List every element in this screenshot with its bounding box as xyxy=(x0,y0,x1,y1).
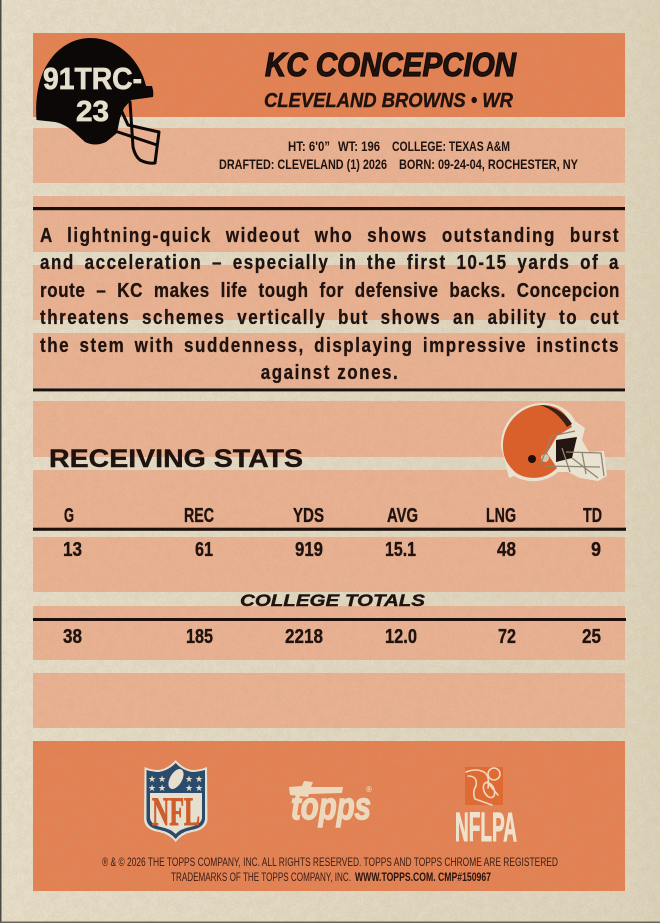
icon: NFL shield xyxy=(144,760,208,842)
table row: college totals: 12.0 xyxy=(385,626,417,648)
panel: player info band xyxy=(33,128,625,183)
player vitals: DRAFTED: CLEVELAND (1) 2026 xyxy=(219,157,387,172)
copyright text: TRADEMARKS OF THE TOPPS COMPANY, INC. xyxy=(171,870,351,884)
icon: NFL shield: ★ xyxy=(195,775,203,785)
copyright text: WWW.TOPPS.COM. CMP#150967 xyxy=(355,870,491,884)
icon: Topps logo: topps xyxy=(291,786,371,828)
stats heading: RECEIVING STATS xyxy=(49,445,303,473)
table row: season stats: 13 xyxy=(63,539,82,561)
player vitals: COLLEGE: TEXAS A&M xyxy=(392,139,510,154)
icon: NFLPA logo xyxy=(455,767,517,850)
table row: college totals: 25 xyxy=(582,626,601,648)
panel: college totals band xyxy=(33,606,625,660)
player vitals xyxy=(219,139,578,172)
table row: season stats: 919 xyxy=(295,539,323,561)
table row: college totals xyxy=(63,626,601,648)
player vitals: BORN: 09-24-04, ROCHESTER, NY xyxy=(399,157,578,172)
table header: receiving stats: YDS xyxy=(293,505,324,527)
table row: season stats: 48 xyxy=(497,539,516,561)
icon: NFL shield: ★ xyxy=(185,784,193,794)
icon: NFL shield: NFL xyxy=(152,789,200,834)
table header: receiving stats: AVG xyxy=(387,505,418,527)
team and position: CLEVELAND BROWNS • WR xyxy=(264,89,513,112)
table header: receiving stats: TD xyxy=(583,505,602,527)
biography text: and acceleration – especially in the first 10-15 yards of a xyxy=(40,252,620,274)
biography text: route – KC makes life tough for defensive backs. Concepcion xyxy=(40,280,620,302)
icon: Browns helmet xyxy=(501,403,607,481)
panel: footer xyxy=(33,741,625,891)
icon: NFL shield: ★ xyxy=(158,775,166,785)
player name: KC CONCEPCION xyxy=(265,46,517,83)
table header: receiving stats xyxy=(64,505,602,527)
table row: season stats: 15.1 xyxy=(385,539,416,561)
black helmet with card number: 23 xyxy=(76,96,109,128)
panel: season stats band xyxy=(33,537,625,592)
icon: NFL shield: ★ xyxy=(195,784,203,794)
panel: biography bands xyxy=(33,196,625,388)
player vitals: HT: 6'0” xyxy=(288,139,330,154)
copyright text xyxy=(102,855,558,884)
table header: receiving stats: REC xyxy=(184,505,214,527)
biography text: threatens schemes vertically but shows an ability to cut xyxy=(40,307,620,329)
panel: stats heading bands xyxy=(33,401,625,527)
table row: college totals: 72 xyxy=(498,626,516,648)
table row: college totals: 185 xyxy=(186,626,213,648)
biography text: against zones. xyxy=(261,362,399,384)
college totals heading: COLLEGE TOTALS xyxy=(240,591,426,610)
biography text: the stem with suddenness, displaying impressive instincts xyxy=(40,335,620,357)
table header: receiving stats: LNG xyxy=(486,505,516,527)
table row: season stats xyxy=(63,539,601,561)
panel: empty band xyxy=(33,673,625,728)
text: NFLPA xyxy=(455,804,517,850)
biography text xyxy=(40,225,620,384)
icon: Topps logo: ® xyxy=(366,785,372,794)
black helmet with card number: 91TRC- xyxy=(43,61,142,96)
table row: college totals: 38 xyxy=(63,626,82,648)
table header: receiving stats: G xyxy=(64,505,74,527)
icon: NFL shield: ★ xyxy=(158,784,166,794)
table row: season stats: 9 xyxy=(591,539,601,561)
panel: name banner xyxy=(33,33,625,117)
icon: NFL shield: ★ xyxy=(148,784,156,794)
biography text: A lightning-quick wideout who shows outstanding burst xyxy=(40,225,620,247)
icon: NFL shield: ★ xyxy=(148,775,156,785)
black helmet with card number xyxy=(36,38,159,163)
icon: NFL shield: ★ xyxy=(185,775,193,785)
table row: college totals: 2218 xyxy=(285,626,323,648)
player vitals: WT: 196 xyxy=(338,139,380,154)
table row: season stats: 61 xyxy=(195,539,213,561)
